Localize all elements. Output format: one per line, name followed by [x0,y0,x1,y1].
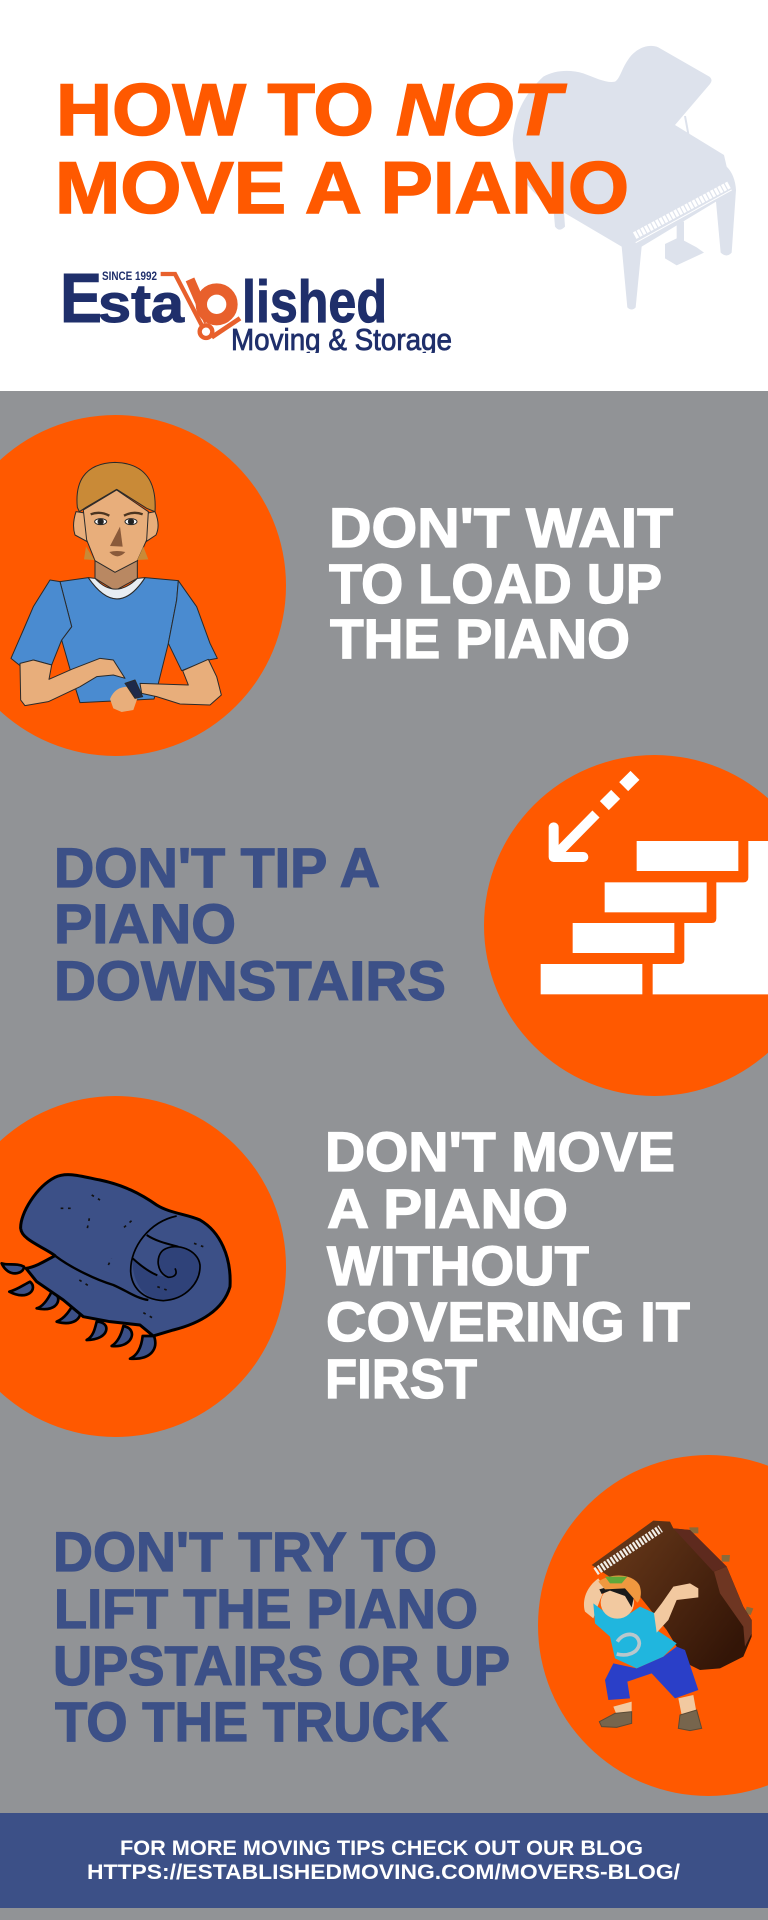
tip 1 text: THE PIANO [330,607,630,670]
tip 1 text [329,496,673,670]
title: MOVE A PIANO [55,148,629,229]
footer text: HTTPS://ESTABLISHEDMOVING.COM/MOVERS-BLOG/ [87,1861,680,1884]
tip 3 text [325,1120,690,1410]
title: HOW TO [56,70,374,151]
tip 2 text [54,836,446,1012]
circle 4 [538,1455,768,1796]
icon: grand piano watermark [513,46,736,309]
tip 1 text: DON'T WAIT [329,496,673,559]
footer text [87,1837,680,1884]
footer text: FOR MORE MOVING TIPS CHECK OUT OUR BLOG [120,1837,643,1860]
title: NOT [396,70,567,151]
icon: man checking watch [11,462,221,712]
tip 4 text: TO THE TRUCK [55,1690,448,1753]
icon: stairs with down arrow [541,771,768,994]
tip 4 text: UPSTAIRS OR UP [53,1634,510,1697]
logo: Established Moving and Storage: E [60,259,102,337]
logo: Established Moving and Storage [64,272,452,353]
logo: Established Moving and Storage: SINCE 1992 [102,271,157,283]
tip 3 text: A PIANO [327,1177,568,1240]
tip 4 text: LIFT THE PIANO [54,1577,478,1640]
icon: rolled blanket [2,1175,230,1359]
tip 2 text: DON'T TIP A [54,836,380,899]
tip 2 text: PIANO [54,892,236,955]
tip 2 text: DOWNSTAIRS [54,949,446,1012]
tip 3 text: DON'T MOVE [325,1120,675,1183]
logo: Established Moving and Storage: sta [98,274,185,334]
tip 4 text: DON'T TRY TO [53,1520,437,1583]
tip 3 text: COVERING IT [326,1290,690,1353]
panel: footer band [0,1813,768,1908]
tip 3 text: FIRST [325,1347,477,1410]
tip 1 text: TO LOAD UP [329,552,662,615]
icon: man carrying piano [584,1521,753,1731]
circle 3 [0,1096,286,1437]
circle 1 [0,415,286,756]
circle 2 [484,755,768,1096]
panel: header [0,0,768,391]
tip 4 text [53,1520,510,1753]
logo: Established Moving and Storage: Moving & Storage [231,322,452,357]
panel: tips background [0,391,768,1920]
logo: Established Moving and Storage: lished [242,269,387,335]
title [55,70,629,229]
tip 3 text: WITHOUT [327,1234,589,1297]
